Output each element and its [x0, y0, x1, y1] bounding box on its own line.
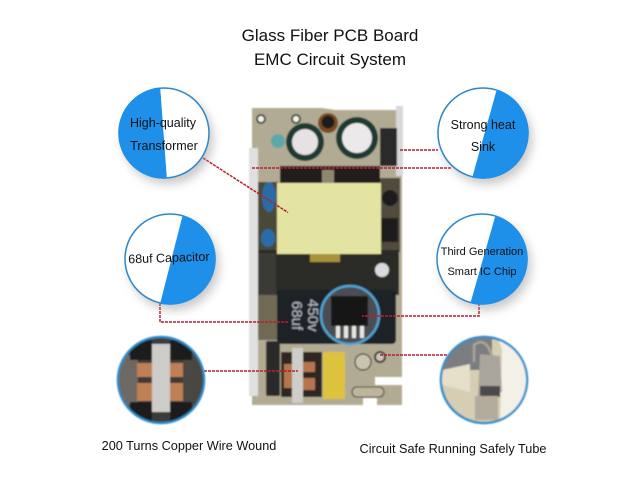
- large capacitor: [277, 290, 396, 344]
- label: copper wire: 200 Turns Copper Wire Wound: [102, 439, 276, 453]
- blue capacitors left: [261, 182, 276, 247]
- PCB board photo: [249, 106, 403, 405]
- bottom pad: [352, 387, 384, 397]
- heat sink transistor: [380, 128, 397, 166]
- callout: 68uf Capacitor: 68uf Capacitor: [128, 250, 210, 266]
- title: Glass Fiber PCB Board: [242, 26, 418, 45]
- right side dark components: [381, 190, 398, 242]
- electrolytic capacitor one: [286, 123, 324, 161]
- callout: Third Generation Smart IC Chip: Smart IC Chip: [447, 266, 517, 278]
- capacitor markings: [288, 299, 321, 332]
- lower left trace area: [258, 295, 278, 340]
- fuse pad: [355, 352, 385, 370]
- photo circle: copper wire coil: [118, 337, 205, 423]
- IC chip magnifier: [321, 286, 379, 344]
- yellow capacitor: [323, 352, 345, 399]
- dark transformer band: [280, 166, 380, 186]
- yellow transformer label: [277, 183, 381, 254]
- capacitor markings: 68uf: [288, 301, 305, 331]
- mid dark region: [258, 250, 399, 295]
- callout: Strong heat Sink: Sink: [471, 140, 496, 154]
- mounting holes: [257, 115, 300, 123]
- capacitor markings: 450v: [304, 299, 321, 332]
- callout: High-quality Transformer: Transformer: [130, 139, 198, 153]
- callout: Strong heat Sink: Strong heat: [451, 118, 516, 132]
- right heat sink strip: [396, 106, 403, 176]
- black core: [266, 341, 280, 396]
- left heat sink strip: [249, 148, 258, 396]
- label: safety tube: Circuit Safe Running Safely Tube: [360, 442, 546, 456]
- electrolytic capacitor two: [336, 117, 378, 159]
- callout: Strong heat Sink: [438, 85, 535, 184]
- small teal component: [271, 134, 285, 148]
- callout: Third Generation Smart IC Chip: [437, 210, 535, 310]
- title: EMC Circuit System: [254, 50, 406, 69]
- yellow bobbin: [310, 253, 340, 262]
- callout: High-quality Transformer: High-quality: [130, 116, 197, 130]
- small capacitor: [375, 263, 389, 277]
- dark side areas beside transformer: [258, 182, 278, 252]
- board substrate: [252, 106, 402, 405]
- photo circle: safety fuse tube: [441, 337, 527, 423]
- callout: High-quality Transformer: [110, 85, 213, 184]
- silver bar: [292, 348, 303, 403]
- callout: 68uf Capacitor: [125, 210, 225, 310]
- inductor: [318, 113, 338, 133]
- red dashed leader lines: [160, 150, 479, 371]
- callout: Third Generation Smart IC Chip: Third Generation: [441, 246, 523, 258]
- title: [242, 26, 418, 69]
- copper coil: [281, 352, 322, 397]
